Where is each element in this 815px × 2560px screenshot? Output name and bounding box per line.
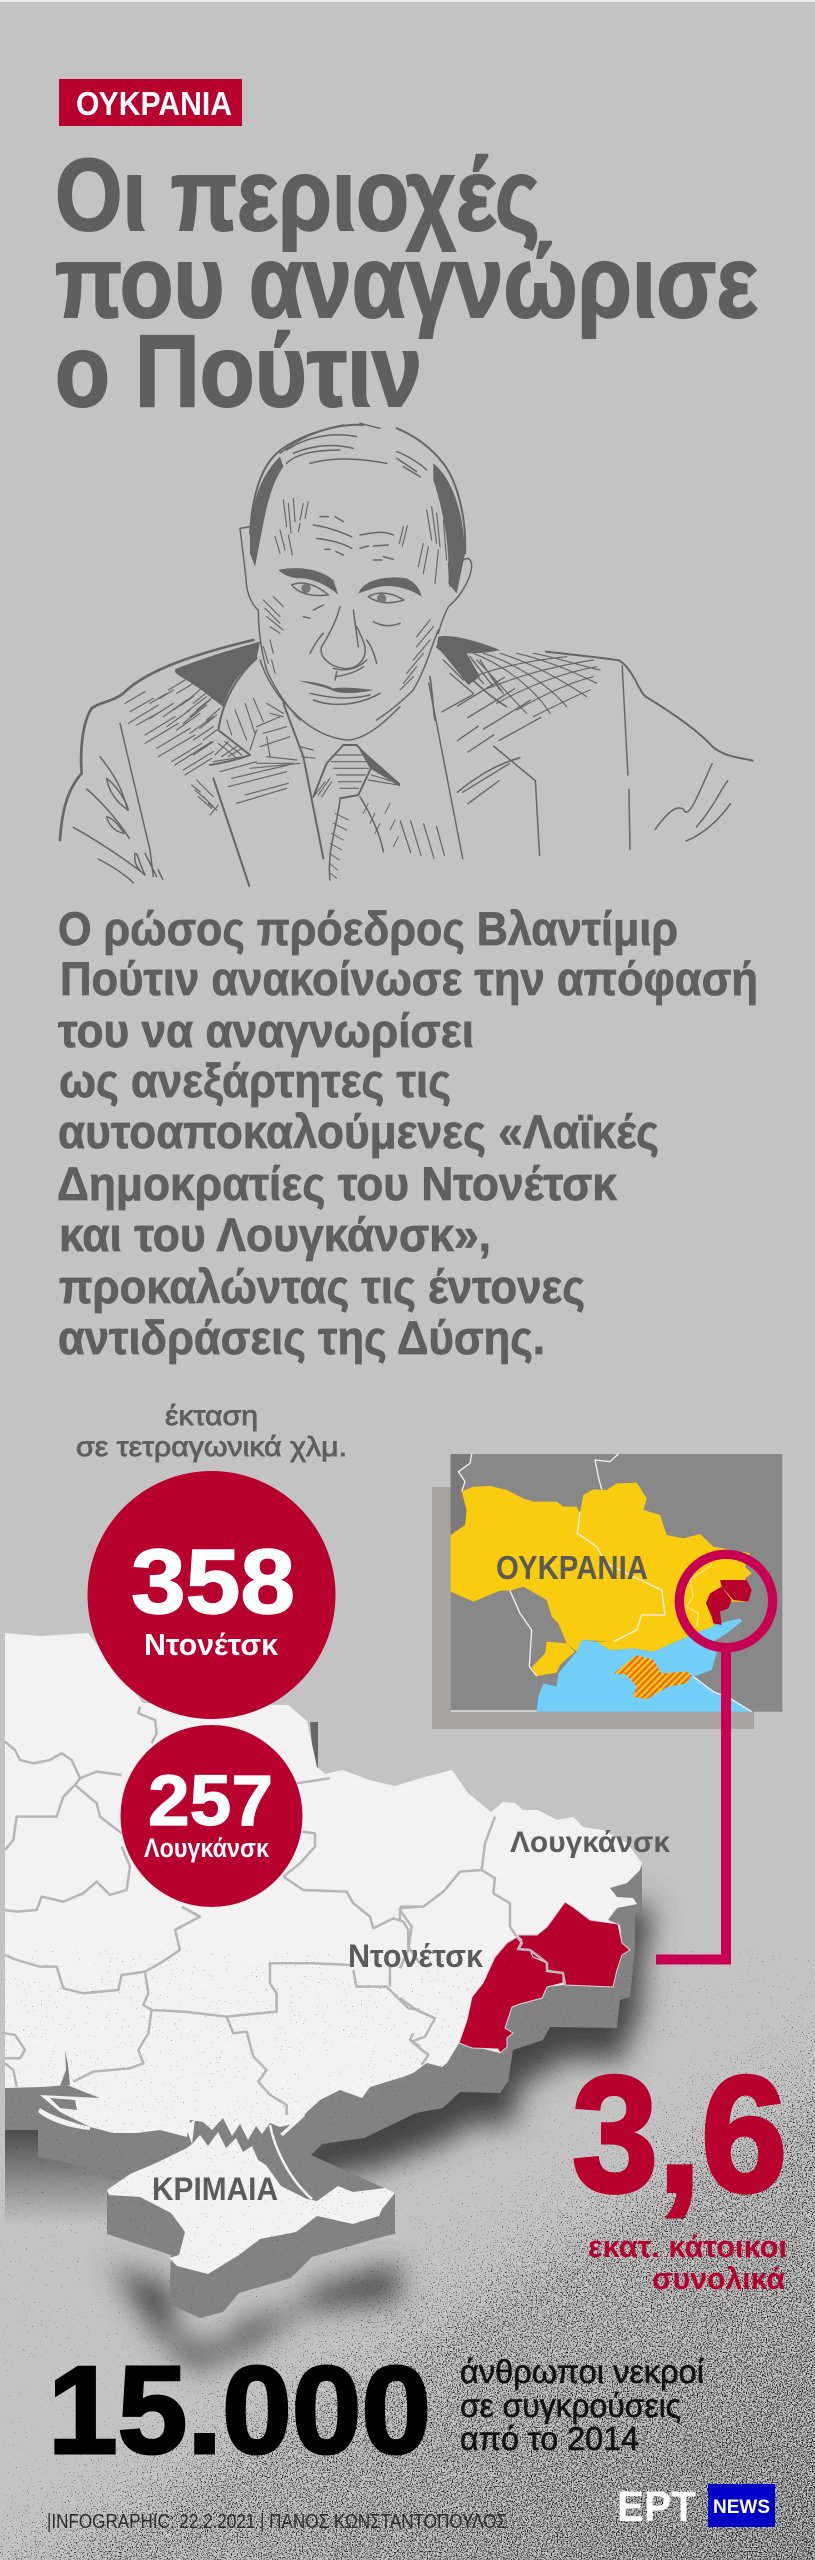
connector line from inset to map [656,1650,726,1960]
inset locator map of Ukraine [432,1454,782,1729]
stat: deaths 15.000 [48,2342,704,2480]
stat circle: Donetsk area 358: Ντονέτσκ [144,1627,279,1662]
illustration: portrait sketch of Putin [60,423,753,886]
category tag [59,79,242,126]
area caption: σε τετραγωνικά χλμ. [76,1431,347,1462]
map: extruded land edge [5,1722,642,2318]
map: region borders [5,1707,517,2115]
map label: Donetsk: Ντονέτσκ [348,1938,483,1974]
stat circle: Donetsk area 358: 358 [131,1531,295,1633]
map label: Luhansk: Λουγκάνσκ [510,1826,670,1859]
category tag: ΟΥΚΡΑΝΙΑ [76,85,232,122]
stat: population 3,6: συνολικά [652,2261,785,2296]
map: soft cast shadow [5,1902,650,2370]
stat: deaths 15.000: σε συγκρούσεις [460,2387,681,2424]
intro text [57,902,758,1364]
speckle texture [0,1950,815,2560]
stat: deaths 15.000: 15.000 [48,2342,431,2480]
logo: ERT News: NEWS [713,2497,770,2518]
credits: |INFOGRAPHIC: 22.2.2021 | ΠΑΝΟΣ ΚΩΝΣΤΑΝΤΟΠΟΥΛΟΣ [47,2511,507,2533]
intro text: αυτοαποκαλούμενες «Λαϊκές [58,1105,659,1158]
logo: ERT News [617,2483,775,2531]
label: Crimea: ΚΡΙΜΑΙΑ [152,2171,278,2207]
stat: deaths 15.000: άνθρωποι νεκροί [460,2353,704,2390]
stat circle: Donetsk area 358 [88,1471,336,1719]
intro text: αντιδράσεις της Δύσης. [58,1311,545,1364]
map: Ukraine land [5,1633,642,2140]
title: Οι περιοχές [55,138,540,252]
intro text: Δημοκρατίες του Ντονέτσκ [57,1157,618,1210]
stat circle: Luhansk area 257 [120,1725,302,1907]
stat: deaths 15.000: από το 2014 [460,2420,639,2457]
intro text: Ο ρώσος πρόεδρος Βλαντίμιρ [58,902,678,955]
stat circle: Luhansk area 257: Λουγκάνσκ [144,1833,270,1863]
title [55,138,758,428]
stat: population 3,6 [572,2042,787,2296]
area caption [76,1400,347,1462]
stat: population 3,6: 3,6 [572,2042,787,2226]
intro text: προκαλώντας τις έντονες [59,1260,585,1313]
stat: population 3,6: εκατ. κάτοικοι [588,2229,787,2264]
map: occupied Donetsk and Luhansk regions [459,1902,630,2053]
inset label: Ukraine: ΟΥΚΡΑΝΙΑ [496,1549,648,1586]
intro text: ως ανεξάρτητες τις [59,1054,451,1107]
map: Crimea [107,2120,395,2274]
intro text: και του Λουγκάνσκ», [59,1208,491,1261]
intro text: του να αναγνωρίσει [58,1004,474,1057]
title: ο Πούτιν [55,314,422,428]
intro text: Πούτιν ανακοίνωσε την απόφασή [60,952,758,1005]
logo: ERT News: ΕΡΤ [617,2483,696,2531]
area caption: έκταση [165,1400,258,1431]
stat circle: Luhansk area 257: 257 [148,1762,273,1841]
